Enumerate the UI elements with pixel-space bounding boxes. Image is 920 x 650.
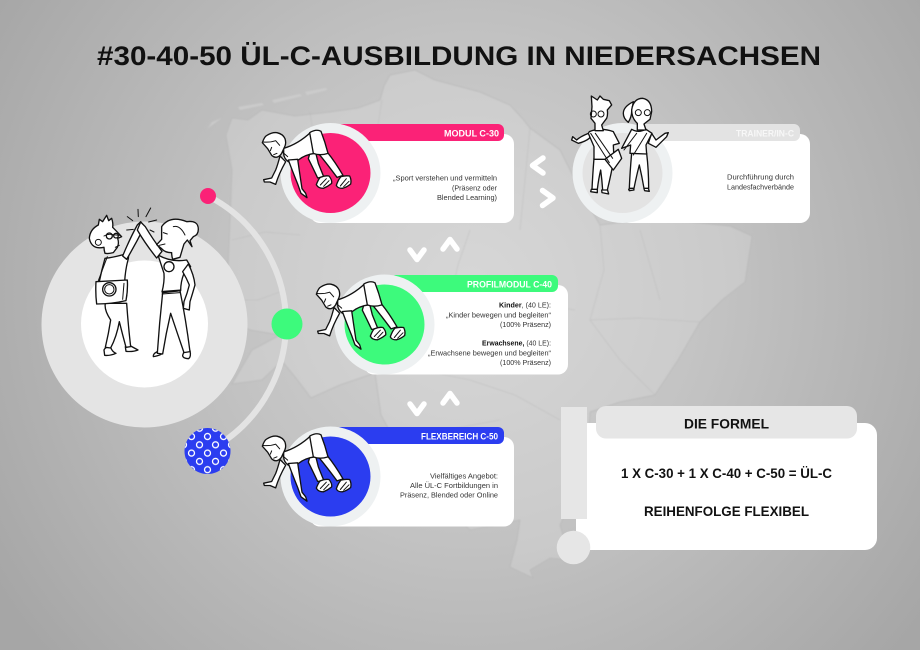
text block: (Präsenz oder [452,184,498,192]
arrow: forward to Trainer/in-C [542,190,553,206]
text block [400,472,498,500]
header: Modul C-30 [335,124,504,141]
circle badge [280,426,380,526]
heading: Die Formel [596,406,857,438]
text block: Durchführung durch [727,172,794,182]
icon: runner [262,434,351,501]
text block: „Erwachsene bewegen und begleiten“ [428,348,552,358]
left circle with high-five figures [42,208,248,428]
arrow: down to Flexbereich [410,404,424,414]
text block [393,174,498,202]
panel: Modul C-30 [262,123,514,223]
header: Trainer/in-C [640,124,800,141]
header: Profilmodul C-40 [390,275,558,292]
text block: (100% Präsenz) [500,320,551,329]
text block: Alle ÜL-C Fortbildungen in [410,481,498,490]
icon: runner [316,282,405,349]
dot: blue patterned [184,428,230,474]
icon: trainers [572,96,668,194]
formula text: 1 X C-30 + 1 X C-40 + C-50 = ÜL-C [621,465,832,481]
title: #30-40-50 ÜL-C-AUSBILDUNG IN NIEDERSACHSEN [97,41,821,71]
circle badge [280,123,380,223]
arrow: up to Profilmodul [443,394,457,403]
panel: Trainer/in-C [572,96,810,223]
order note: REIHENFOLGE FLEXIBEL [644,503,809,519]
text block: Erwachsene, (40 LE): [482,338,551,348]
header: Profilmodul C-40: PROFILMODUL C-40 [467,280,552,290]
circle badge [572,123,672,223]
text block: Landesfachverbände [727,182,794,192]
text block: Vielfältiges Angebot: [430,472,498,480]
text block [727,172,794,192]
connector arc [208,196,286,451]
text block: Präsenz, Blended oder Online [400,490,498,500]
text block: „Kinder bewegen und begleiten“ [446,310,552,320]
header: Flexbereich C-50: FLEXBEREICH C-50 [421,432,498,442]
heading: Die Formel: DIE FORMEL [684,416,769,432]
text block: Blended Learning) [437,193,497,202]
map of Niedersachsen [205,70,752,578]
header: Modul C-30: MODUL C-30 [444,128,499,140]
header: Flexbereich C-50 [335,427,504,444]
text block: Kinder, (40 LE): [499,300,551,310]
text block: „Sport verstehen und vermitteln [393,174,497,182]
icon: exclamation mark [557,407,590,564]
icon: runner [262,130,351,198]
dot: pink [200,188,216,204]
arrow: up to Modul C-30 [443,240,457,249]
circle badge [334,274,434,374]
panel: Flexbereich C-50 [262,426,514,526]
header: Trainer/in-C: TRAINER/IN-C [736,128,794,140]
panel: Profilmodul C-40 [316,274,568,374]
panel: Die Formel [557,406,877,564]
icon: high-five couple [89,208,198,359]
text block: (100% Präsenz) [500,358,551,367]
arrow: back to Modul C-30 [532,158,543,173]
arrow: down to Profilmodul [410,250,424,260]
dot: green [272,308,302,340]
text block [428,300,552,367]
